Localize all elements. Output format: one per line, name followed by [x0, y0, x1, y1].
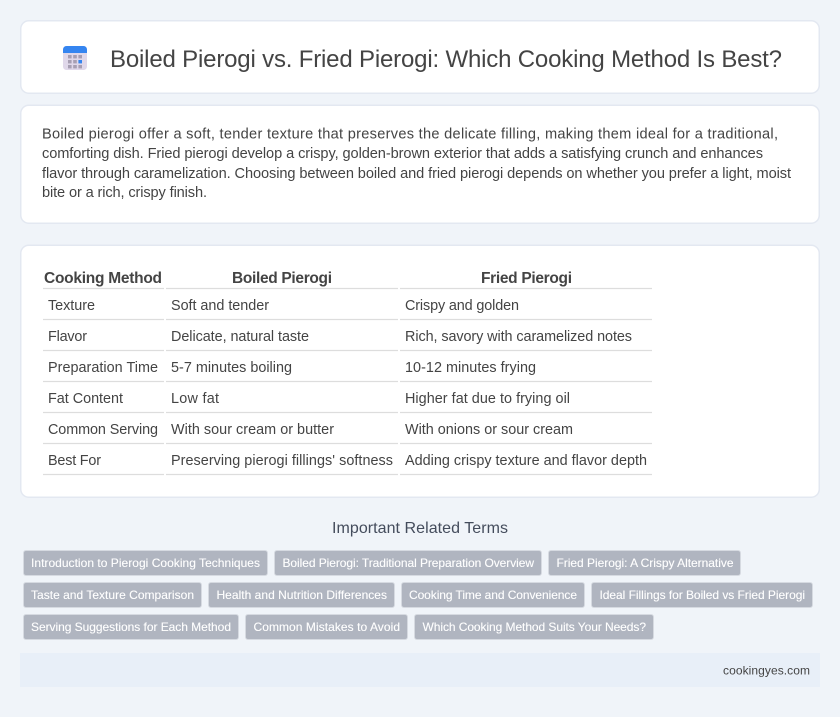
table row: common serving: With onions or sour cream — [405, 422, 573, 438]
table row: fat content: Low fat — [171, 391, 219, 407]
panel: introduction — [21, 105, 819, 223]
tag: Boiled Pierogi: Traditional Preparation Overview — [282, 556, 534, 570]
tag — [548, 550, 740, 576]
icon: calendar — [63, 46, 87, 70]
heading: important related terms: Important Related Terms — [332, 520, 508, 537]
tag: Common Mistakes to Avoid — [254, 620, 400, 634]
table row: best for — [43, 453, 652, 474]
table row: preparation time: Preparation Time — [48, 360, 158, 376]
tag — [24, 550, 268, 576]
tag: Fried Pierogi: A Crispy Alternative — [556, 556, 734, 570]
table header — [43, 270, 652, 288]
table row: preparation time — [43, 360, 652, 382]
table row: best for: Preserving pierogi fillings' softness — [171, 453, 393, 469]
table row: flavor: Flavor — [48, 329, 87, 345]
text block: intro paragraph — [42, 126, 791, 201]
table row: preparation time: 10-12 minutes frying — [405, 360, 536, 376]
tag — [246, 614, 408, 640]
table header: Boiled Pierogi — [232, 270, 332, 287]
tag: Introduction to Pierogi Cooking Techniques — [31, 556, 260, 570]
table row: common serving: With sour cream or butter — [171, 422, 334, 438]
text block: intro paragraph: Boiled pierogi offer a soft, tender texture that preserves the delicate filling, making them ideal for a traditional, — [42, 126, 778, 142]
table row: texture: Soft and tender — [171, 298, 269, 314]
tag — [402, 582, 584, 608]
tag — [208, 582, 394, 608]
tag — [24, 614, 238, 640]
table row: common serving: Common Serving — [48, 422, 158, 438]
table row: fat content: Higher fat due to frying oil — [405, 391, 570, 407]
panel: title header — [21, 21, 819, 93]
panel: comparison table — [21, 245, 819, 497]
tag: Health and Nutrition Differences — [216, 588, 387, 602]
table row: texture: Texture — [48, 298, 95, 314]
text block: intro paragraph: flavor through caramelization. Choosing between boiled and fried pierogi depends on whether you prefer a light, moist — [42, 166, 791, 182]
tag group: related terms — [24, 550, 812, 640]
footer band — [20, 653, 820, 687]
text block: intro paragraph: comforting dish. Fried pierogi develop a crispy, golden-brown exterior that adds a satisfying crunch and enhances — [42, 146, 763, 162]
table row: texture: Crispy and golden — [405, 298, 519, 314]
table row: flavor: Delicate, natural taste — [171, 329, 309, 345]
text block: intro paragraph: bite or a rich, crispy finish. — [42, 185, 207, 201]
table row: fat content — [43, 391, 652, 412]
tag: Ideal Fillings for Boiled vs Fried Pierogi — [600, 588, 805, 602]
table header: Cooking Method — [44, 270, 162, 287]
tag: Cooking Time and Convenience — [409, 588, 577, 602]
tag — [414, 614, 654, 640]
table row: texture — [43, 298, 652, 320]
title: Boiled Pierogi vs. Fried Pierogi: Which Cooking Method Is Best? — [110, 46, 782, 73]
footer: source: cookingyes.com — [723, 664, 810, 678]
table row: common serving — [43, 422, 652, 444]
tag — [274, 550, 542, 576]
table row: preparation time: 5-7 minutes boiling — [171, 360, 292, 376]
tag — [24, 582, 202, 608]
tag — [592, 582, 812, 608]
table header: Fried Pierogi — [481, 270, 572, 287]
tag: Taste and Texture Comparison — [31, 588, 194, 602]
table row: flavor — [43, 329, 652, 350]
table row: flavor: Rich, savory with caramelized notes — [405, 329, 632, 345]
tag: Which Cooking Method Suits Your Needs? — [422, 620, 646, 634]
table row: fat content: Fat Content — [48, 391, 123, 407]
tag: Serving Suggestions for Each Method — [31, 620, 231, 634]
table row: best for: Best For — [48, 453, 101, 469]
table row: best for: Adding crispy texture and flavor depth — [405, 453, 647, 469]
